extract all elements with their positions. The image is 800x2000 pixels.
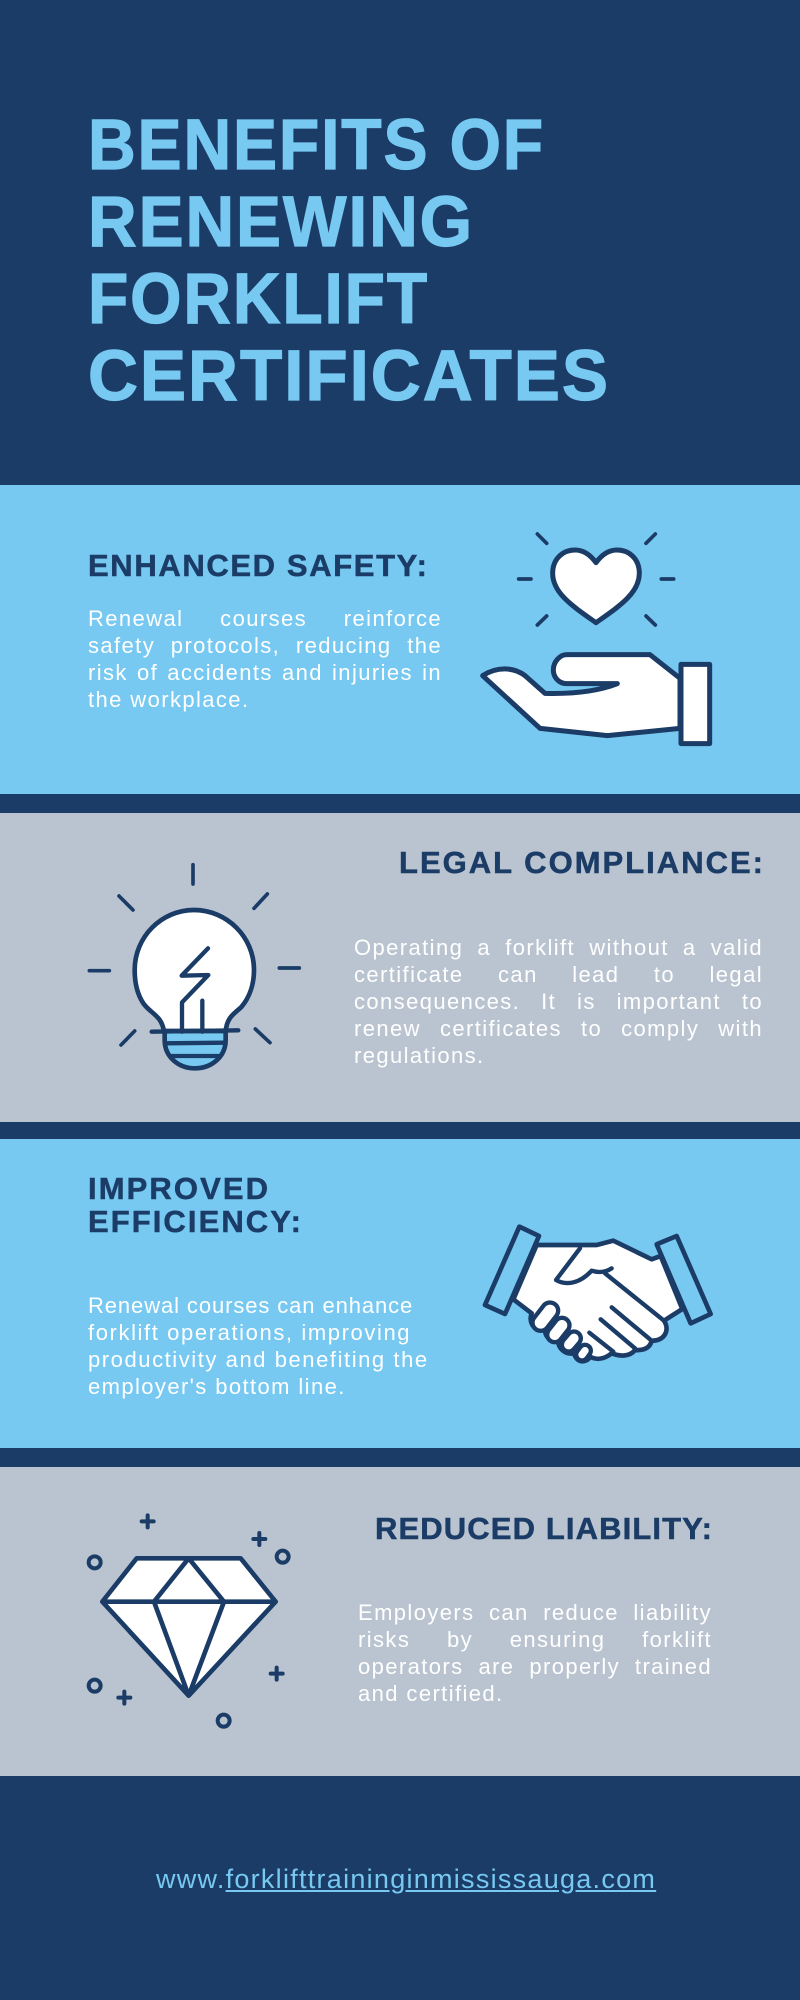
open hand xyxy=(483,655,680,736)
panel: reduced liability background xyxy=(0,1467,800,1776)
text: legal compliance: certificate can lead to legal xyxy=(354,962,763,987)
icon: light bulb xyxy=(89,865,299,1068)
icon: heart in hand xyxy=(483,534,710,744)
heading: legal compliance: LEGAL COMPLIANCE: xyxy=(399,845,763,880)
panel: improved efficiency background xyxy=(0,1139,800,1448)
text: reduced liability xyxy=(358,1600,712,1706)
title: CERTIFICATES xyxy=(88,337,610,416)
text: legal compliance xyxy=(354,935,763,1068)
text: reduced liability: risks by ensuring forklift xyxy=(358,1627,712,1652)
text: enhanced safety: risk of accidents and injuries in xyxy=(88,660,442,685)
title xyxy=(88,106,610,416)
dots xyxy=(89,1551,289,1727)
icon: diamond xyxy=(89,1515,289,1727)
panel: legal compliance background xyxy=(0,813,800,1122)
text: enhanced safety: the workplace. xyxy=(88,687,249,712)
text: legal compliance: Operating a forklift without a valid xyxy=(354,935,763,960)
text: reduced liability: operators are properly trained xyxy=(358,1654,712,1679)
panel: enhanced safety background xyxy=(0,485,800,794)
knuckles xyxy=(541,1311,585,1355)
gem xyxy=(102,1558,276,1696)
bulb glass xyxy=(135,910,254,1032)
title: RENEWING xyxy=(88,183,474,262)
hands xyxy=(513,1241,682,1361)
footer url: www.forklifttraininginmississauga.com xyxy=(156,1864,656,1894)
heart xyxy=(553,550,639,623)
text: improved efficiency: Renewal courses can enhance xyxy=(88,1293,413,1318)
heading: improved efficiency: EFFICIENCY: xyxy=(88,1204,301,1239)
thumb and finger lines xyxy=(556,1248,612,1283)
heading: reduced liability: REDUCED LIABILITY: xyxy=(375,1511,712,1546)
text: legal compliance: consequences. It is important to xyxy=(354,989,763,1014)
heading: enhanced safety: ENHANCED SAFETY: xyxy=(88,548,427,583)
text: improved efficiency: employer's bottom line. xyxy=(88,1374,346,1399)
heading: improved efficiency xyxy=(88,1171,301,1239)
cuff xyxy=(681,664,710,744)
left cuff xyxy=(485,1227,539,1314)
text: improved efficiency: productivity and benefiting the xyxy=(88,1347,429,1372)
title: FORKLIFT xyxy=(88,260,429,339)
text: reduced liability: Employers can reduce liability xyxy=(358,1600,712,1625)
bulb base xyxy=(165,1031,226,1068)
heart rays xyxy=(519,534,674,625)
text: improved efficiency xyxy=(88,1293,429,1399)
icon: handshake xyxy=(485,1227,711,1361)
text: enhanced safety: Renewal courses reinforce xyxy=(88,606,442,631)
heading: improved efficiency: IMPROVED xyxy=(88,1171,268,1206)
text: enhanced safety xyxy=(88,606,442,712)
bulb rays xyxy=(89,865,299,1045)
text: reduced liability: and certified. xyxy=(358,1681,504,1706)
text: legal compliance: renew certificates to comply with xyxy=(354,1016,763,1041)
sparkles xyxy=(118,1515,283,1704)
text: enhanced safety: safety protocols, reducing the xyxy=(88,633,442,658)
base stripes and filament xyxy=(152,948,238,1056)
title: BENEFITS OF xyxy=(88,106,545,185)
text: improved efficiency: forklift operations, improving xyxy=(88,1320,411,1345)
right cuff xyxy=(657,1236,711,1323)
text: legal compliance: regulations. xyxy=(354,1043,485,1068)
